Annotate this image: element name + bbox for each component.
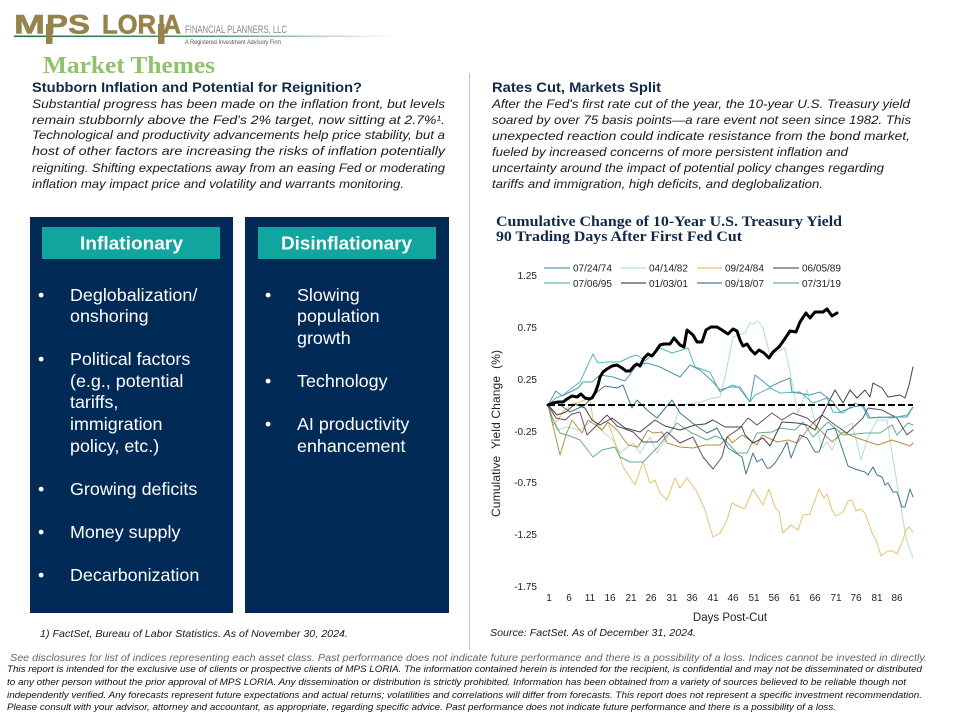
list: inflationary factors: • <box>38 285 44 305</box>
panel: inflationary <box>30 217 233 613</box>
logo: MPS LORIA Financial Planners: PS <box>46 10 90 40</box>
y axis labels: 0.75 <box>518 323 537 334</box>
x axis labels: 21 <box>625 593 637 604</box>
list: inflationary factors: Money supply <box>70 522 180 542</box>
list: inflationary factors <box>38 285 199 585</box>
body: rates: uncertainty around the impact of potential policy changes regarding <box>492 161 884 175</box>
x axis labels: 26 <box>645 593 657 604</box>
y axis labels: -1.75 <box>514 582 537 593</box>
y axis labels <box>514 271 537 593</box>
list: disinflationary factors: growth <box>297 328 351 348</box>
list: inflationary factors: immigration <box>70 414 162 434</box>
body: rates: After the Fed's first rate cut of the year, the 10-year U.S. Treasury yield <box>491 97 910 111</box>
disclosure: legal text: independently verified. Any forecasts represent future expectations and actual returns; volatilities and correlations will differ from forecasts. This report does not represent a specific investment recommendation. <box>7 690 922 700</box>
body: inflation: host of other factors are increasing the risks of inflation potentially <box>32 144 446 158</box>
disclosure: legal text: This report is intended for the exclusive use of clients or prospective clients of MPS LORIA. The information contained herein is intended for the recipient, is confidential and may not be disseminated or distributed <box>7 664 923 674</box>
body: rates <box>491 97 911 191</box>
list: disinflationary factors: Slowing <box>297 285 360 305</box>
x axis labels: 1 <box>546 593 552 604</box>
body: inflation: reigniting. Shifting expectations away from an easing Fed or moderating <box>32 161 445 175</box>
x axis labels <box>546 593 903 604</box>
footnote: left source: 1) FactSet, Bureau of Labor Statistics. As of November 30, 2024. <box>40 628 348 640</box>
x axis labels: 11 <box>585 593 596 604</box>
list: inflationary factors: onshoring <box>70 306 149 326</box>
body: inflation: Substantial progress has been made on the inflation front, but levels <box>32 97 445 111</box>
body: rates: unexpected reaction could indicate resistance from the bond market, <box>492 129 910 143</box>
legend: 07/06/95 <box>573 279 612 290</box>
x axis labels: 56 <box>768 593 780 604</box>
disclosure: legal text <box>7 664 923 712</box>
header: disinflationary: Disinflationary <box>281 234 412 254</box>
legend: 07/31/19 <box>802 279 841 290</box>
body: rates: soared by over 75 basis points—a rare event not seen since 1982. This <box>492 113 911 127</box>
footnote: chart source: Source: FactSet. As of December 31, 2024. <box>490 627 696 639</box>
y axis labels: 1.25 <box>518 271 537 282</box>
y axis labels: -0.75 <box>514 478 537 489</box>
y axis labels: -0.25 <box>514 427 537 438</box>
list: inflationary factors: (e.g., potential <box>70 371 183 391</box>
disclosure: indices note: See disclosures for list of indices representing each asset class. Past performance does not indicate future performance and there is a possibility of a loss. Indices cannot be invested in directly. <box>10 652 927 664</box>
list: inflationary factors: • <box>38 565 44 585</box>
list: inflationary factors: • <box>38 349 44 369</box>
legend: 07/24/74 <box>573 264 612 274</box>
chart title: 90 Trading Days After First Fed Cut <box>496 229 742 245</box>
x axis labels: 76 <box>850 593 862 604</box>
list: disinflationary factors: • <box>265 371 271 391</box>
logo: MPS LORIA Financial Planners: M <box>14 10 45 40</box>
legend: 01/03/01 <box>649 279 688 290</box>
heading: rates: Rates Cut, Markets Split <box>492 79 661 95</box>
y axis title: Cumulative Yield Change (%) <box>489 350 503 517</box>
heading: inflation: Stubborn Inflation and Potential for Reignition? <box>32 79 362 95</box>
chart title <box>496 214 843 245</box>
y axis labels: -1.25 <box>514 530 537 541</box>
x axis labels: 86 <box>891 593 903 604</box>
chart title: Cumulative Change of 10-Year U.S. Treasury Yield <box>496 214 843 230</box>
x axis labels: 31 <box>666 593 678 604</box>
y axis labels: 0.25 <box>518 375 537 386</box>
list: disinflationary factors: population <box>297 306 380 326</box>
x axis labels: 16 <box>604 593 616 604</box>
logo: MPS LORIA Financial Planners: LOR <box>102 10 156 40</box>
list: disinflationary factors: AI productivity <box>297 414 409 434</box>
list: inflationary factors: • <box>38 522 44 542</box>
body: rates: tariffs and immigration, high deficits, and deglobalization. <box>492 177 823 191</box>
disclosure: legal text: Please consult with your advisor, attorney and accountant, as appropriate, regarding specific advice. Past performance does not indicate future performance and there is a possibility of a loss. <box>7 702 836 712</box>
x axis labels: 41 <box>707 593 719 604</box>
zero baseline <box>548 404 913 406</box>
list: inflationary factors: Growing deficits <box>70 479 197 499</box>
x axis labels: 61 <box>789 593 801 604</box>
x axis labels: 51 <box>748 593 760 604</box>
list: inflationary factors: Deglobalization/ <box>70 285 197 305</box>
text block: rates commentary <box>491 79 911 191</box>
list: inflationary factors: Decarbonization <box>70 565 199 585</box>
legend <box>544 264 841 290</box>
x axis labels: 46 <box>727 593 739 604</box>
logo: MPS LORIA Financial Planners: FINANCIAL PLANNERS, LLC <box>185 24 287 36</box>
series lines <box>548 321 913 558</box>
list: inflationary factors: • <box>38 479 44 499</box>
body: rates: fueled by increased concerns of more persistent inflation and <box>492 145 848 159</box>
logo: MPS LORIA Financial Planners <box>14 10 396 46</box>
list: inflationary factors: policy, etc.) <box>70 436 159 456</box>
x axis labels: 66 <box>809 593 821 604</box>
x axis labels: 81 <box>871 593 883 604</box>
list: disinflationary factors: • <box>265 414 271 434</box>
x axis labels: 71 <box>830 593 842 604</box>
list: disinflationary factors: enhancement <box>297 436 405 456</box>
x axis labels: 36 <box>686 593 698 604</box>
legend: 09/18/07 <box>725 279 764 290</box>
list: disinflationary factors: • <box>265 285 271 305</box>
page title: Market Themes <box>43 53 215 79</box>
header: inflationary <box>42 227 220 259</box>
list: inflationary factors: tariffs, <box>70 392 118 412</box>
body: inflation <box>32 97 446 191</box>
highlighted series: current cycle <box>548 309 837 405</box>
list: disinflationary factors: Technology <box>297 371 388 391</box>
legend: 04/14/82 <box>649 264 688 274</box>
text block: inflation commentary <box>32 79 446 191</box>
logo: MPS LORIA Financial Planners: A Registered Investment Advisory Firm <box>185 39 281 46</box>
body: inflation: remain stubbornly above the Fed's 2% target, now sitting at 2.7%¹. <box>32 113 445 127</box>
legend: 06/05/89 <box>802 264 841 274</box>
legend: 09/24/84 <box>725 264 764 274</box>
header: inflationary: Inflationary <box>80 234 183 254</box>
line chart: cumulative yield change <box>489 264 913 624</box>
body: inflation: Technological and productivity advancements help price stability, but a <box>32 128 445 142</box>
body: inflation: inflation may impact price and volatility and warrants monitoring. <box>32 177 404 191</box>
disclosure: legal text: to any other person without the prior approval of MPS LORIA. Any dissemination or distribution is strictly prohibited. Information has been obtained from a variety of sources believed to be reliable though not <box>7 677 907 687</box>
header: disinflationary <box>258 227 436 259</box>
list: inflationary factors: Political factors <box>70 349 190 369</box>
x axis labels: 6 <box>566 593 572 604</box>
panel: disinflationary <box>245 217 449 613</box>
x axis title: Days Post-Cut <box>693 612 768 624</box>
logo: MPS LORIA Financial Planners: A <box>163 10 181 40</box>
list: disinflationary factors <box>265 285 409 456</box>
logo: MPS LORIA Financial Planners: I <box>158 10 165 40</box>
